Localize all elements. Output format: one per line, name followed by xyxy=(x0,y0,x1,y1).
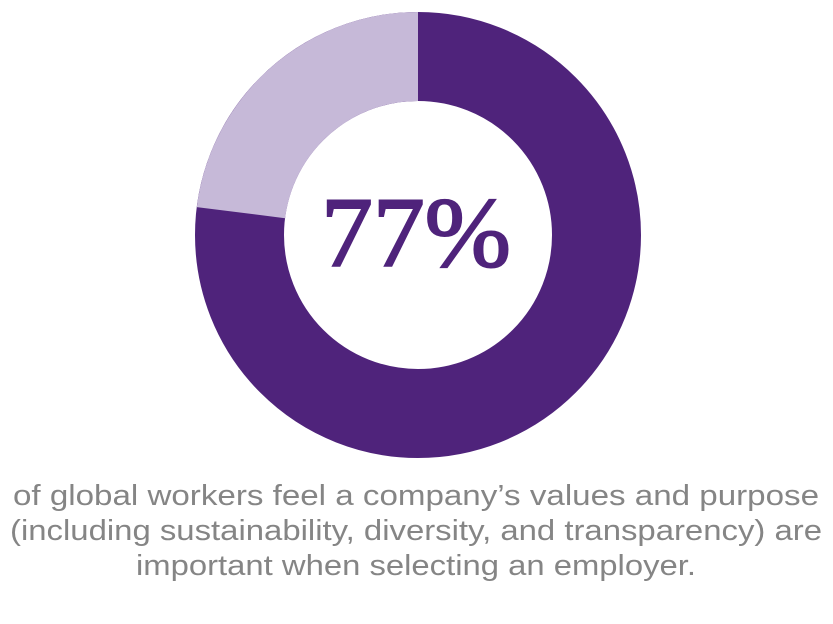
light segment 23% xyxy=(197,12,418,218)
dark segment 77% xyxy=(240,56,596,414)
caption text: (including sustainability, diversity, and transparency) are xyxy=(10,515,822,547)
donut chart xyxy=(197,12,597,414)
caption text: important when selecting an employer. xyxy=(136,550,696,582)
big number: 77% xyxy=(321,177,511,288)
caption text xyxy=(10,480,822,582)
caption text: of global workers feel a company’s values and purpose xyxy=(13,480,819,512)
